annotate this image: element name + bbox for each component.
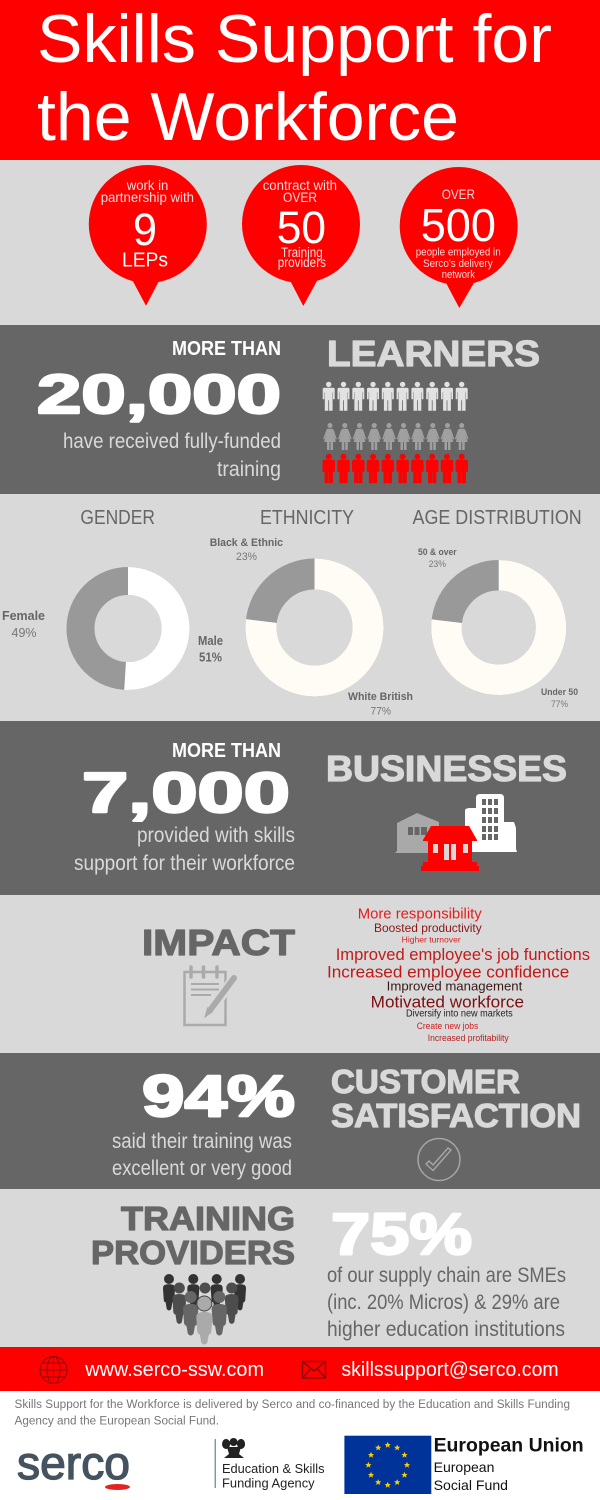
learners headline figure: training <box>217 458 281 481</box>
businesses headline figure: provided with skills <box>137 824 295 847</box>
european social fund text: European <box>434 1459 494 1475</box>
icon: check mark <box>418 1138 460 1180</box>
pin: 500 people employed: 500 <box>421 199 496 251</box>
pin: 9 LEPs: partnership with <box>101 189 194 205</box>
heading: customer satisfaction: SATISFACTION <box>331 1097 581 1134</box>
chart: ethnicity donut: ETHNICITY <box>260 507 354 529</box>
chart: gender donut: 51% <box>199 650 222 664</box>
chart: age distribution donut: Under 50 <box>541 687 578 698</box>
chart: gender donut: 49% <box>12 625 37 640</box>
heading: training providers <box>91 1200 295 1271</box>
pin: 500 people employed: network <box>442 269 475 281</box>
chart: gender donut <box>2 507 223 676</box>
word cloud: impact: Improved management <box>387 979 523 994</box>
website link: www.serco-ssw.com <box>84 1359 264 1381</box>
pin: 500 people employed: Serco's delivery <box>423 258 493 270</box>
word cloud: impact: Increased profitability <box>428 1033 509 1043</box>
icon: group of people <box>163 1274 246 1345</box>
supply chain figure: of our supply chain are SMEs <box>327 1264 566 1287</box>
icon: envelope <box>302 1362 326 1378</box>
supply chain figure: 75% <box>331 1202 472 1267</box>
learners headline figure: MORE THAN <box>172 338 281 360</box>
pin: 500 people employed: OVER <box>442 186 475 202</box>
pin: 50 training providers: contract with <box>263 177 337 193</box>
funding statement: Agency and the European Social Fund. <box>14 1416 219 1428</box>
word cloud: impact: Higher turnover <box>402 935 461 945</box>
chart: age distribution donut <box>412 507 582 710</box>
pin: 9 LEPs: 9 <box>133 204 157 255</box>
european social fund text: Social Fund <box>434 1477 508 1493</box>
heading: training providers: PROVIDERS <box>91 1234 295 1271</box>
chart: age distribution donut: 77% <box>551 699 568 710</box>
satisfaction headline figure: said their training was <box>112 1130 292 1153</box>
supply chain figure: (inc. 20% Micros) & 29% are <box>327 1291 560 1314</box>
heading: customer satisfaction: CUSTOMER <box>331 1063 520 1100</box>
logo: european union flag <box>344 1436 431 1494</box>
logo: serco: serco <box>17 1437 130 1489</box>
word cloud: impact: Increased employee confidence <box>327 962 569 981</box>
icon: notepad and pencil <box>184 967 234 1025</box>
chart: ethnicity donut: 23% <box>236 551 257 563</box>
businesses headline figure: support for their workforce <box>74 852 295 875</box>
pin: 50 training providers <box>242 165 360 306</box>
funding statement: Skills Support for the Workforce is delivered by Serco and co-financed by the Education and Skills Funding <box>14 1399 570 1411</box>
word cloud: impact: Create new jobs <box>417 1021 479 1031</box>
logo: education and skills funding agency: Education & Skills <box>222 1461 325 1476</box>
word cloud: impact: Diversify into new markets <box>406 1009 513 1020</box>
pin: 50 training providers: 50 <box>277 202 326 253</box>
pin: 500 people employed: people employed in <box>416 247 501 259</box>
satisfaction headline figure <box>112 1064 295 1180</box>
chart: ethnicity donut: Black & Ethnic <box>210 537 283 549</box>
icon: globe <box>40 1356 67 1384</box>
pin: 500 people employed <box>400 167 518 308</box>
supply chain figure <box>327 1202 566 1341</box>
heading: learners: LEARNERS <box>327 333 540 374</box>
european social fund text <box>434 1436 584 1493</box>
funding statement <box>14 1399 570 1428</box>
word cloud: impact: More responsibility <box>358 905 482 922</box>
chart: gender donut: Male <box>198 633 223 648</box>
businesses headline figure: 7,000 <box>82 761 290 825</box>
chart: age distribution donut: 50 & over <box>418 547 457 558</box>
pin: 9 LEPs: LEPs <box>122 250 168 272</box>
heading: customer satisfaction <box>331 1063 581 1134</box>
heading: training providers: TRAINING <box>121 1200 295 1237</box>
businesses headline figure <box>74 740 295 875</box>
logo: education and skills funding agency: Funding Agency <box>222 1476 315 1490</box>
supply chain figure: higher education institutions <box>327 1318 565 1341</box>
chart: ethnicity donut <box>210 507 413 718</box>
title: Skills Support for <box>37 1 552 77</box>
learners headline figure <box>37 338 281 481</box>
pin: 50 training providers: OVER <box>283 189 317 205</box>
satisfaction headline figure: 94% <box>142 1064 295 1129</box>
chart: ethnicity donut: White British <box>348 691 413 703</box>
logo: education and skills funding agency <box>215 1438 325 1490</box>
title: the Workforce <box>37 79 459 155</box>
pictogram: learners <box>323 382 469 483</box>
word cloud: impact: Boosted productivity <box>374 921 482 935</box>
pin: 50 training providers: providers <box>278 255 326 270</box>
chart: gender donut: Female <box>2 608 45 623</box>
pin: 50 training providers: Training <box>281 245 323 260</box>
satisfaction headline figure: excellent or very good <box>112 1157 292 1180</box>
learners headline figure: have received fully-funded <box>63 430 281 453</box>
chart: age distribution donut: 23% <box>429 559 447 570</box>
european social fund text: European Union <box>434 1436 584 1457</box>
title <box>37 1 552 155</box>
icon: buildings <box>395 794 517 871</box>
email link: skillssupport@serco.com <box>341 1359 559 1381</box>
word cloud: impact: Improved employee's job functions <box>336 945 590 964</box>
chart: age distribution donut: AGE DISTRIBUTION <box>412 507 582 529</box>
learners headline figure: 20,000 <box>37 363 281 425</box>
heading: impact: IMPACT <box>142 922 295 963</box>
pin: 9 LEPs: work in <box>126 177 168 193</box>
chart: ethnicity donut: 77% <box>370 706 391 718</box>
word cloud: impact <box>327 905 590 1043</box>
businesses headline figure: MORE THAN <box>172 740 281 762</box>
word cloud: impact: Motivated workforce <box>371 993 524 1012</box>
chart: gender donut: GENDER <box>80 507 155 529</box>
heading: businesses: BUSINESSES <box>326 748 567 789</box>
pin: 9 LEPs <box>89 165 207 306</box>
